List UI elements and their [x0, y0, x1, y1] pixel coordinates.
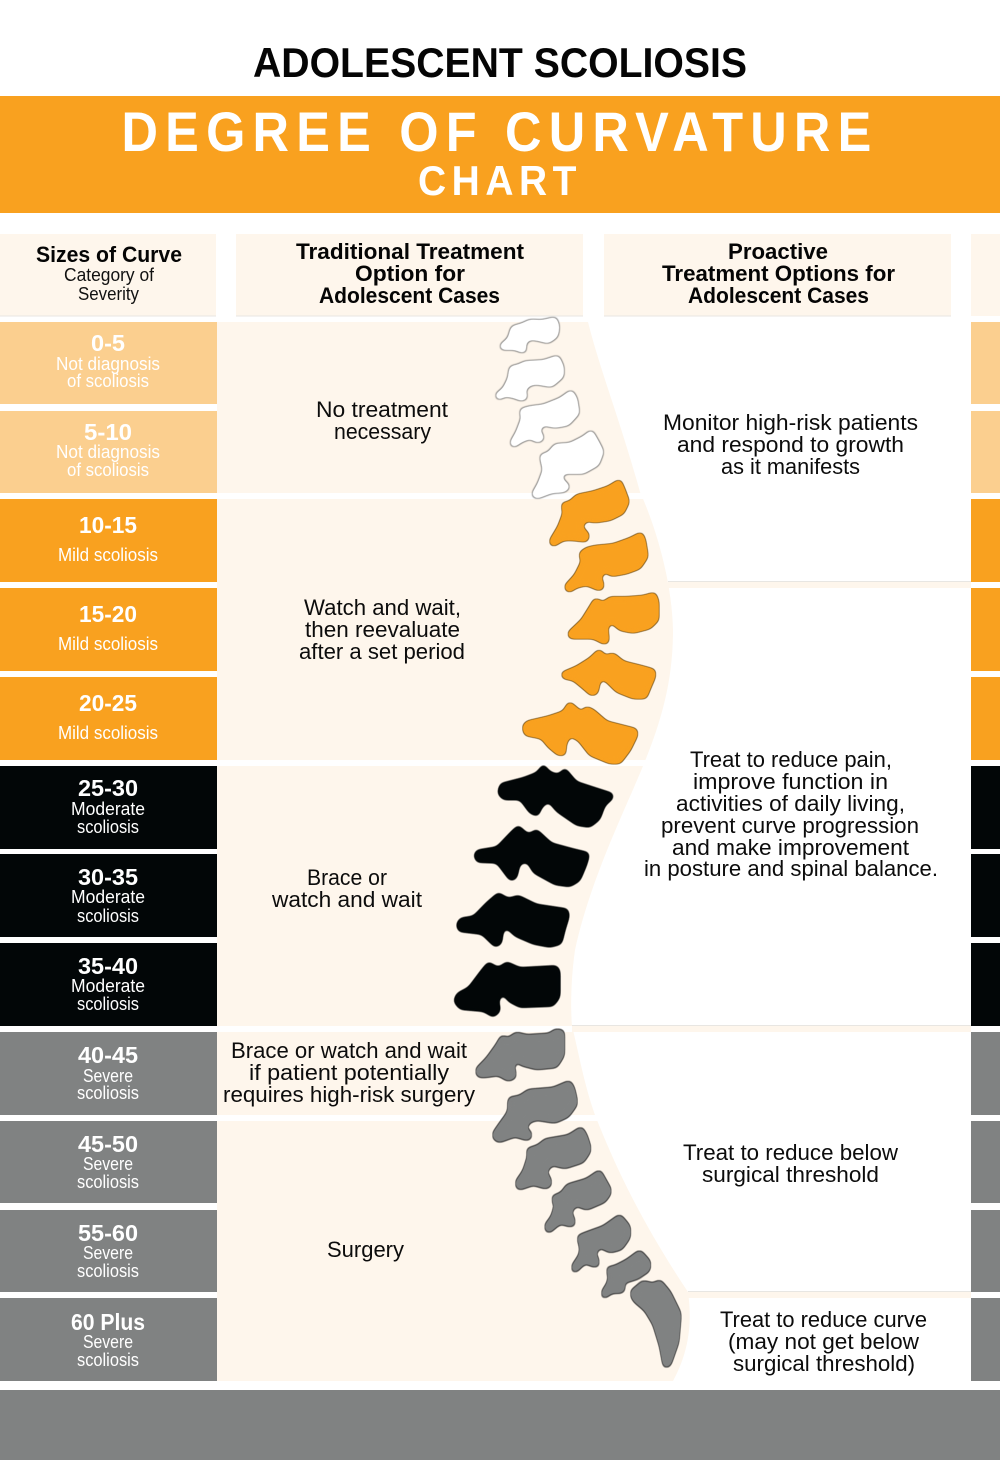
- proactive: treat to reduce pain: activities of daily living,: [676, 791, 905, 816]
- traditional: watch and wait: then reevaluate: [305, 617, 460, 642]
- severity rows: not diagnosed: of scoliosis: [67, 460, 149, 480]
- proactive: monitor: [663, 410, 918, 479]
- traditional: brace if high-risk surgery: [223, 1038, 475, 1107]
- severity rows: severe: Severe: [83, 1332, 133, 1352]
- proactive: treat to reduce pain: Treat to reduce pain,: [690, 747, 892, 772]
- proactive: monitor: Monitor high-risk patients: [663, 410, 918, 435]
- proactive: reduce curve: Treat to reduce curve: [720, 1307, 927, 1332]
- proactive column separators: [572, 581, 971, 1298]
- banner heading: DEGREE OF CURVATURE: [122, 100, 878, 163]
- column header: proactive treatment: Treatment Options for: [662, 261, 895, 286]
- column header: sizes of curve: Sizes of Curve: [36, 242, 182, 267]
- panel: traditional treatment band following the spine curve: [217, 322, 690, 1381]
- severity rows: moderate: [0, 766, 217, 1026]
- right edge header strip: [971, 234, 1000, 316]
- severity rows: severe: scoliosis: [77, 1172, 139, 1192]
- column header: proactive treatment: [604, 234, 951, 316]
- proactive: treat to reduce pain: [644, 747, 938, 881]
- severity rows: severe: Severe: [83, 1243, 133, 1263]
- traditional: watch and wait: [299, 595, 465, 664]
- severity rows: moderate: 35-40: [78, 953, 138, 979]
- proactive: below surgical threshold: Treat to reduce below: [683, 1140, 898, 1165]
- traditional: watch and wait: after a set period: [299, 639, 465, 664]
- banner: degree of curvature chart: [0, 96, 1000, 213]
- severity rows: severe: 55-60: [78, 1220, 138, 1246]
- title: ADOLESCENT SCOLIOSIS: [253, 39, 747, 86]
- proactive: monitor: as it manifests: [721, 454, 860, 479]
- severity rows: severe: 45-50: [78, 1131, 138, 1157]
- severity rows: mild: 15-20: [79, 601, 137, 627]
- traditional: no treatment: [316, 397, 448, 444]
- severity rows: mild: Mild scoliosis: [58, 545, 158, 565]
- severity rows: moderate: 25-30: [78, 775, 138, 801]
- group gaps between treatment bands: [217, 493, 653, 1121]
- proactive: treat to reduce pain: prevent curve progression: [661, 813, 919, 838]
- severity rows: moderate: 30-35: [78, 864, 138, 890]
- vertebrae: white, not diagnosed: [495, 317, 603, 498]
- column header: proactive treatment: Adolescent Cases: [688, 283, 869, 308]
- traditional: brace or watch and wait: watch and wait: [271, 887, 422, 912]
- severity rows: not diagnosed: of scoliosis: [67, 371, 149, 391]
- severity rows: severe: scoliosis: [77, 1083, 139, 1103]
- traditional: brace if high-risk surgery: requires high-risk surgery: [223, 1082, 475, 1107]
- vertebrae: orange, mild: [523, 479, 658, 763]
- traditional: brace if high-risk surgery: Brace or watch and wait: [231, 1038, 467, 1063]
- severity rows: mild: 10-15: [79, 512, 137, 538]
- severity rows: severe: [0, 1032, 217, 1381]
- severity rows: not diagnosed: Not diagnosis: [56, 442, 160, 462]
- column header: sizes of curve: [0, 234, 216, 316]
- severity rows: moderate: scoliosis: [77, 994, 139, 1014]
- severity rows: severe: Severe: [83, 1154, 133, 1174]
- proactive: below surgical threshold: surgical threshold: [702, 1162, 879, 1187]
- column header: traditional treatment: Adolescent Cases: [319, 283, 500, 308]
- severity rows: moderate: Moderate: [71, 887, 145, 907]
- column header: sizes of curve: Category of: [64, 265, 155, 285]
- traditional: watch and wait: Watch and wait,: [304, 595, 461, 620]
- severity rows: not diagnosed: 5-10: [84, 419, 132, 445]
- traditional: no treatment: No treatment: [316, 397, 448, 422]
- severity rows: moderate: Moderate: [71, 799, 145, 819]
- column header: traditional treatment: Option for: [355, 261, 465, 286]
- severity rows: severe: 40-45: [78, 1042, 138, 1068]
- proactive: below surgical threshold: [683, 1140, 898, 1187]
- proactive: reduce curve: (may not get below: [728, 1329, 919, 1354]
- column header: traditional treatment: [236, 234, 583, 316]
- banner subheading: CHART: [418, 157, 582, 204]
- traditional: brace or watch and wait: Brace or: [307, 865, 387, 890]
- vertebrae: grey, severe: [475, 1030, 681, 1367]
- severity rows: mild: Mild scoliosis: [58, 723, 158, 743]
- traditional: brace or watch and wait: [271, 865, 422, 912]
- right edge colour strip: [971, 322, 1000, 1381]
- severity rows: moderate: scoliosis: [77, 906, 139, 926]
- severity rows: moderate: scoliosis: [77, 817, 139, 837]
- traditional: brace if high-risk surgery: if patient potentially: [249, 1060, 449, 1085]
- severity rows: not diagnosed: Not diagnosis: [56, 354, 160, 374]
- proactive: reduce curve: [720, 1307, 927, 1376]
- severity rows: mild: Mild scoliosis: [58, 634, 158, 654]
- severity rows: severe: 60 Plus: [71, 1309, 145, 1335]
- column header: proactive treatment: Proactive: [728, 239, 828, 264]
- traditional: surgery: Surgery: [327, 1237, 404, 1262]
- proactive: treat to reduce pain: and make improvement: [672, 835, 909, 860]
- severity rows: not diagnosed: [0, 322, 217, 493]
- severity rows: severe: Severe: [83, 1066, 133, 1086]
- proactive: reduce curve: surgical threshold): [733, 1351, 915, 1376]
- severity rows: severe: scoliosis: [77, 1350, 139, 1370]
- footer band: [0, 1390, 1000, 1460]
- proactive: treat to reduce pain: in posture and spinal balance.: [644, 856, 938, 881]
- proactive: treat to reduce pain: improve function in: [693, 769, 888, 794]
- proactive: monitor: and respond to growth: [677, 432, 904, 457]
- severity rows: severe: scoliosis: [77, 1261, 139, 1281]
- severity rows: not diagnosed: 0-5: [91, 330, 125, 356]
- column header: sizes of curve: Severity: [78, 284, 139, 304]
- traditional: no treatment: necessary: [334, 419, 431, 444]
- severity rows: moderate: Moderate: [71, 976, 145, 996]
- severity rows: mild: [0, 499, 217, 760]
- vertebrae: black, moderate: [453, 764, 614, 1017]
- severity rows: mild: 20-25: [79, 690, 137, 716]
- column header: traditional treatment: Traditional Treatment: [296, 239, 525, 264]
